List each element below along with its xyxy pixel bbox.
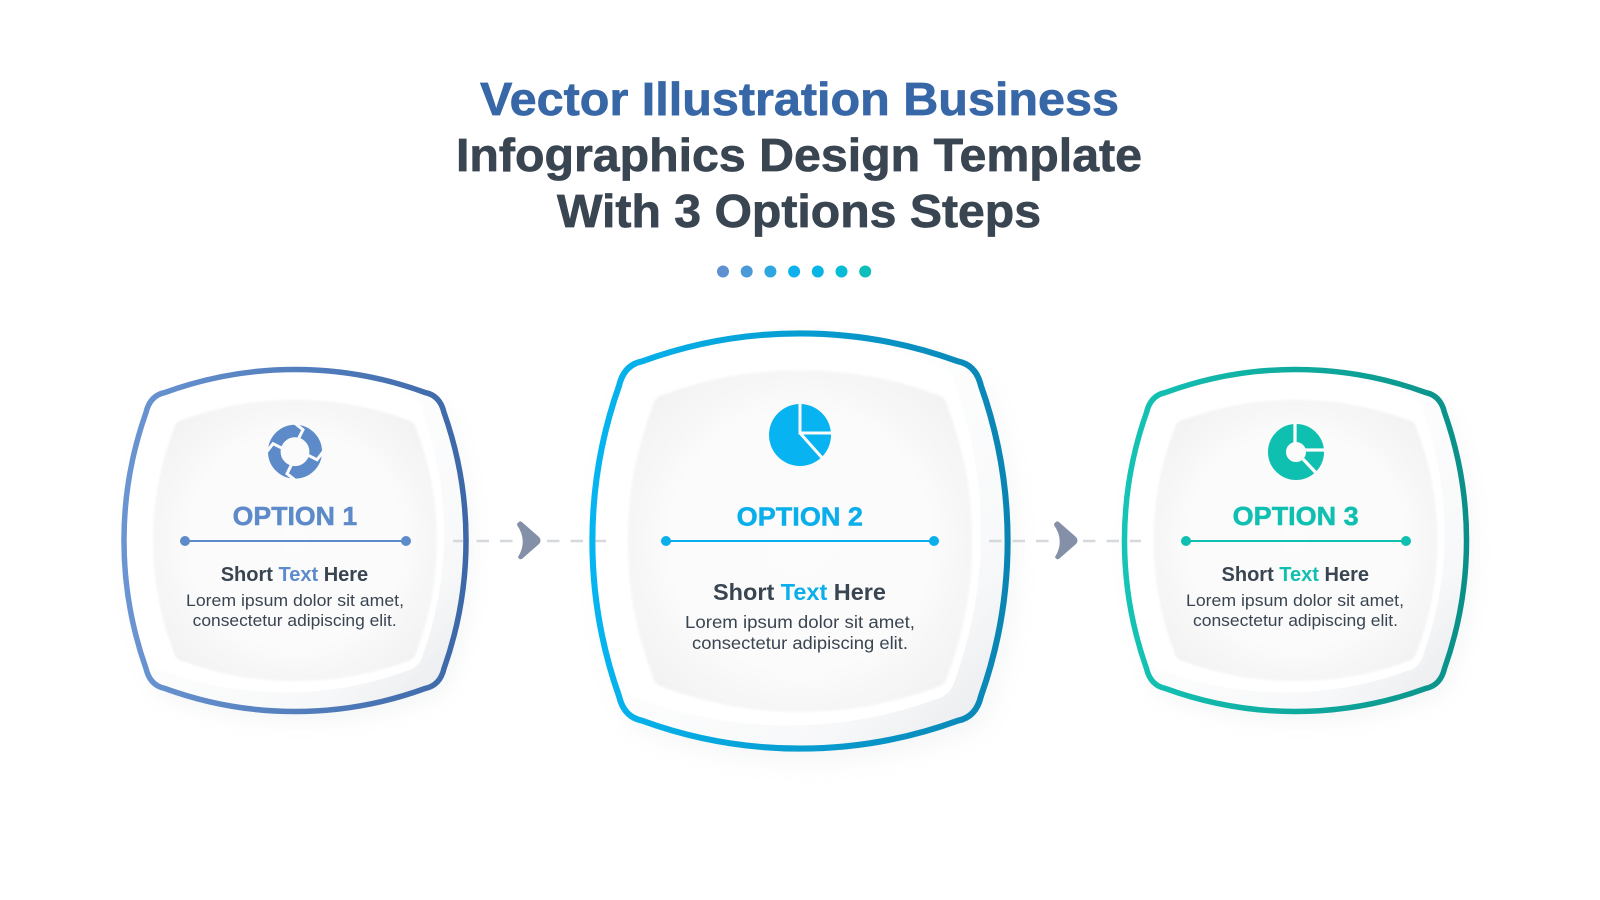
card 2 background [592, 333, 1015, 761]
option 1 subheading: Short Text Here [221, 564, 368, 586]
option 2 subheading: Short Text Here [713, 579, 886, 605]
card 3 background [1124, 370, 1473, 721]
option 3 divider [1181, 536, 1411, 546]
option 1 divider [180, 536, 411, 546]
connector 1: dashes and arrow [453, 521, 606, 559]
title [456, 73, 1142, 237]
option 1 heading: OPTION 1 [233, 501, 357, 531]
card 3 outline [1124, 370, 1467, 711]
option 1 body line 2: consectetur adipiscing elit. [193, 612, 397, 630]
option 2 heading: OPTION 2 [737, 502, 863, 532]
option 2 body line 2: consectetur adipiscing elit. [692, 633, 908, 653]
panel: option 3 [1124, 370, 1467, 711]
option 1 body line 1: Lorem ipsum dolor sit amet, [186, 592, 404, 610]
option 3 body line 1: Lorem ipsum dolor sit amet, [1186, 592, 1404, 610]
option 2 divider [661, 536, 939, 546]
option 3 subheading: Short Text Here [1222, 564, 1369, 586]
title line 1: Vector Illustration Business [480, 73, 1119, 125]
title line 2: Infographics Design Template [456, 129, 1142, 181]
decorative dots row [717, 266, 871, 278]
icon: donut chart [1277, 422, 1326, 476]
option 2 body line 1: Lorem ipsum dolor sit amet, [685, 612, 915, 632]
card 1 outline [124, 370, 466, 711]
card 1 background [124, 370, 472, 721]
connector 2: dashes and arrow [989, 521, 1141, 559]
icon: pie chart [769, 402, 833, 466]
option 3 heading: OPTION 3 [1233, 501, 1359, 531]
option 3 body line 2: consectetur adipiscing elit. [1193, 612, 1398, 630]
card 2 outline [592, 333, 1008, 749]
title line 3: With 3 Options Steps [557, 185, 1041, 237]
panel: option 2 [592, 333, 1008, 749]
panel: option 1 [124, 370, 466, 711]
icon: circular arrows [266, 423, 324, 481]
